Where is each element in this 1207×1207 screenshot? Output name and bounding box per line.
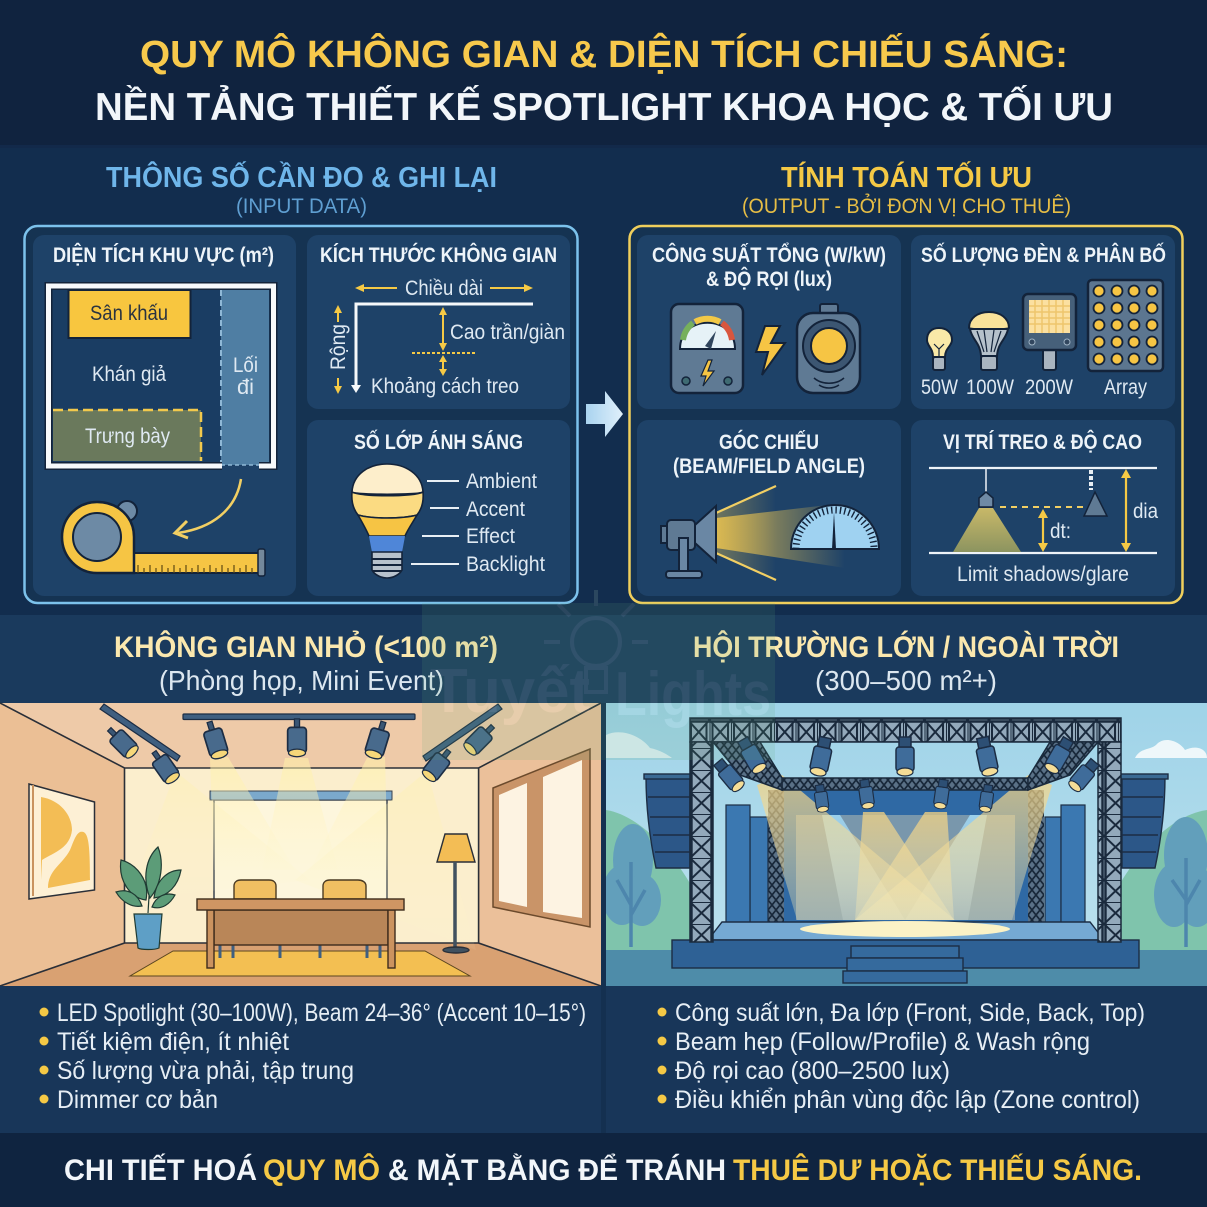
panel: beam angle: (BEAM/FIELD ANGLE) [673,455,865,478]
layer labels: Accent [466,498,525,521]
heading: output [742,160,1071,218]
footer text: CHI TIẾT HOÁ [64,1153,257,1187]
wattage labels: 50W [921,376,958,399]
title: NỀN TẢNG THIẾT KẾ SPOTLIGHT KHOA HỌC & TỐI ƯU [95,84,1113,129]
wall art [29,784,94,899]
list: large hall: Điều khiển phân vùng độc lập (Zone control) [675,1086,1140,1114]
header band [0,0,1207,145]
screen [796,815,1015,920]
section band: parameters [0,148,1207,615]
panel: area [33,235,296,596]
floor plan: Trưng bày [85,425,170,448]
steps [843,946,967,983]
trees [602,817,1207,947]
panel: light layers [307,420,570,596]
floor plan: Lối [233,354,258,377]
stage deck [672,922,1139,968]
list: large hall: Công suất lớn, Đa lớp (Front, Side, Back, Top) [675,999,1145,1027]
icon: 100W bulb [969,312,1009,370]
light beams [128,757,476,950]
panel: quantity: SỐ LƯỢNG ĐÈN & PHÂN BỐ [921,243,1166,267]
floor plan: đi [237,376,254,399]
heading: input data: (INPUT DATA) [236,195,367,218]
illustration: outdoor stage [602,703,1207,986]
ground [606,950,1207,986]
layer labels: Ambient [466,470,537,493]
light beam [716,486,845,580]
panel: hanging position: dia [1133,500,1158,523]
panel: dimensions: Cao trần/giàn [450,321,565,344]
hills [606,810,1207,950]
line-array speakers [644,774,1168,868]
wattage labels: 200W [1025,376,1073,399]
footer text: QUY MÔ [263,1153,380,1187]
track rails [100,704,502,761]
truss frame [690,718,1121,942]
label: width [327,305,350,394]
arrow: to tape measure [175,479,241,538]
list: large hall [658,999,1145,1114]
list: small space [40,999,586,1114]
icon: power meter [671,304,743,393]
title: QUY MÔ KHÔNG GIAN & DIỆN TÍCH CHIẾU SÁNG: [140,31,1068,76]
stage beams [757,775,1052,937]
icon: 200W panel [1023,294,1076,370]
plant [116,847,181,950]
heading: large hall: (300–500 m²+) [815,665,997,696]
heading: large hall: HỘI TRƯỜNG LỚN / NGOÀI TRỜI [693,630,1119,664]
inner truss towers [768,790,1044,925]
list: small space: LED Spotlight (30–100W), Beam 24–36° (Accent 10–15°) [57,999,586,1027]
layer labels: Backlight [466,553,545,576]
floor plan: Sân khấu [90,302,168,325]
panel: dimensions [307,235,570,409]
footer text: & MẶT BẰNG ĐỂ TRÁNH [388,1153,726,1187]
panel: quantity [911,235,1175,409]
wattage labels: 100W [966,376,1014,399]
list: large hall: Beam hẹp (Follow/Profile) & Wash rộng [675,1028,1090,1056]
icon: spotlight side [661,506,716,578]
panel: power and lux: & ĐỘ RỌI (lux) [706,267,832,291]
panel: beam angle [637,420,901,596]
rug [130,951,470,976]
axes: room corner [351,304,533,393]
window [493,749,590,927]
stage lights [712,735,1101,813]
panel: power and lux: CÔNG SUẤT TỔNG (W/kW) [652,243,886,267]
panel: hanging position: dt: [1050,520,1071,543]
divider between scenes [601,703,606,1133]
list: small space: Tiết kiệm điện, ít nhiệt [57,1028,289,1056]
panel: dimensions: KÍCH THƯỚC KHÔNG GIAN [320,243,557,267]
icon: 50W bulb [927,328,952,370]
title [95,31,1113,129]
panel: power and lux [637,235,901,409]
wattage labels [921,376,1147,399]
panel: hanging position: Limit shadows/glare [957,563,1129,586]
panel: hanging position: VỊ TRÍ TREO & ĐỘ CAO [943,430,1142,454]
scale heading band [0,615,1207,703]
icon: angle dial [791,505,879,549]
footer band [0,1133,1207,1207]
heading: input data [106,160,497,218]
layer labels [466,470,545,576]
heading: small space: KHÔNG GIAN NHỎ (<100 m²) [114,630,498,664]
layer labels: Effect [466,525,515,548]
panel: dimensions: Chiều dài [405,277,483,300]
icon: tape measure [62,501,265,576]
arrows: heights [1038,469,1131,552]
heading: output: TÍNH TOÁN TỐI ƯU [781,160,1032,194]
arrow: input to output [586,391,623,437]
label: width: Rộng [327,324,350,370]
list: small space: Dimmer cơ bản [57,1086,218,1114]
floor lamp [437,834,475,953]
icon: LED array [1088,280,1163,371]
chairs [234,880,366,899]
heading: small space [114,630,498,696]
desk [197,899,404,968]
panel group: input [24,226,578,603]
heading: output: (OUTPUT - BỞI ĐƠN VỊ CHO THUÊ) [742,194,1071,218]
side towers [726,805,1085,928]
panel group: output [630,226,1182,603]
heading: input data: THÔNG SỐ CẦN ĐO & GHI LẠI [106,160,497,194]
floor plan: Khán giả [92,363,166,386]
panel: light layers: SỐ LỚP ÁNH SÁNG [354,430,523,454]
footer text: THUÊ DƯ HOẶC THIẾU SÁNG. [733,1153,1142,1187]
watermark: Lights [615,660,771,729]
panel: dimensions: Khoảng cách treo [371,375,519,398]
watermark: Tuyết [430,657,590,726]
stage back [770,790,1040,922]
lamp and cone [953,468,1107,552]
watermark [422,590,775,760]
wattage labels: Array [1104,376,1147,399]
icon: layered bulb [352,464,423,578]
floor plan [48,286,274,466]
panel: hanging position [911,420,1175,596]
projection screen [210,791,392,910]
heading: small space: (Phòng họp, Mini Event) [159,665,444,696]
icon: lightning bolt [756,326,785,375]
arrows: ceiling height [412,307,475,376]
track spotlights [103,719,499,786]
illustration: meeting room [0,703,601,986]
list: large hall: Độ rọi cao (800–2500 lux) [675,1057,950,1085]
list: small space: Số lượng vừa phải, tập trung [57,1057,354,1085]
footer text [64,1153,1142,1187]
clouds [606,732,1207,758]
arrows: length [355,284,533,292]
bullets band [0,986,1207,1133]
panel: beam angle: GÓC CHIẾU [719,430,819,454]
panel: area: DIỆN TÍCH KHU VỰC (m²) [53,243,274,267]
leader lines [411,481,459,564]
heading: large hall [693,630,1119,696]
icon: spotlight front [797,304,860,393]
